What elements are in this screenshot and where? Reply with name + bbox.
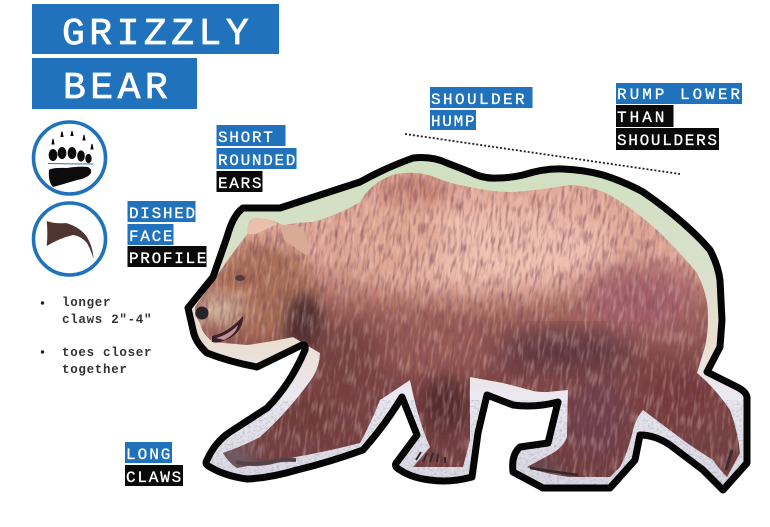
label: short rounded ears: SHORT [218, 129, 275, 147]
label: rump lower than shoulders: SHOULDERS [617, 132, 719, 150]
bear illustration [184, 154, 750, 494]
label: rump lower than shoulders: RUMP LOWER [617, 86, 743, 104]
fur shading [198, 176, 712, 462]
bullet list: toes closer [62, 346, 152, 360]
label: rump lower than shoulders: THAN [617, 109, 667, 127]
bear body fur [195, 172, 740, 477]
bear outline [188, 158, 747, 490]
icon: paw print [34, 122, 106, 194]
label: shoulder hump [430, 87, 532, 131]
bear cut-out background [188, 158, 750, 492]
icon: claw [34, 203, 106, 275]
label: rump lower than shoulders [616, 83, 743, 150]
bullet list: claws 2″-4″ [62, 313, 152, 327]
label: shoulder hump: HUMP [431, 113, 476, 131]
rear and front claws [236, 450, 732, 475]
fur texture [195, 172, 738, 477]
dotted back line [405, 134, 680, 174]
bullet list: longer [62, 296, 111, 310]
title line: GRIZZLY: GRIZZLY [62, 13, 253, 56]
label: dished face profile: FACE [129, 228, 174, 246]
label: shoulder hump: SHOULDER [431, 91, 527, 109]
label: dished face profile: PROFILE [129, 250, 208, 268]
label: dished face profile [128, 201, 208, 268]
label: short rounded ears: EARS [218, 175, 263, 193]
bullet list: together [62, 363, 128, 377]
label: long claws: LONG [126, 446, 172, 464]
ears [248, 218, 308, 256]
title line: BEAR [32, 58, 197, 110]
label: long claws [125, 442, 183, 487]
label: dished face profile: DISHED [129, 205, 197, 223]
label: long claws: CLAWS [126, 469, 183, 487]
label: short rounded ears: ROUNDED [218, 152, 297, 170]
title: Grizzly Bear [32, 4, 279, 110]
title line: GRIZZLY [32, 4, 279, 56]
worn pale paws [214, 449, 562, 474]
label: short rounded ears [216, 125, 297, 193]
eye, nose and mouth [196, 275, 245, 343]
bullet list [41, 296, 152, 377]
title line: BEAR: BEAR [63, 67, 172, 110]
